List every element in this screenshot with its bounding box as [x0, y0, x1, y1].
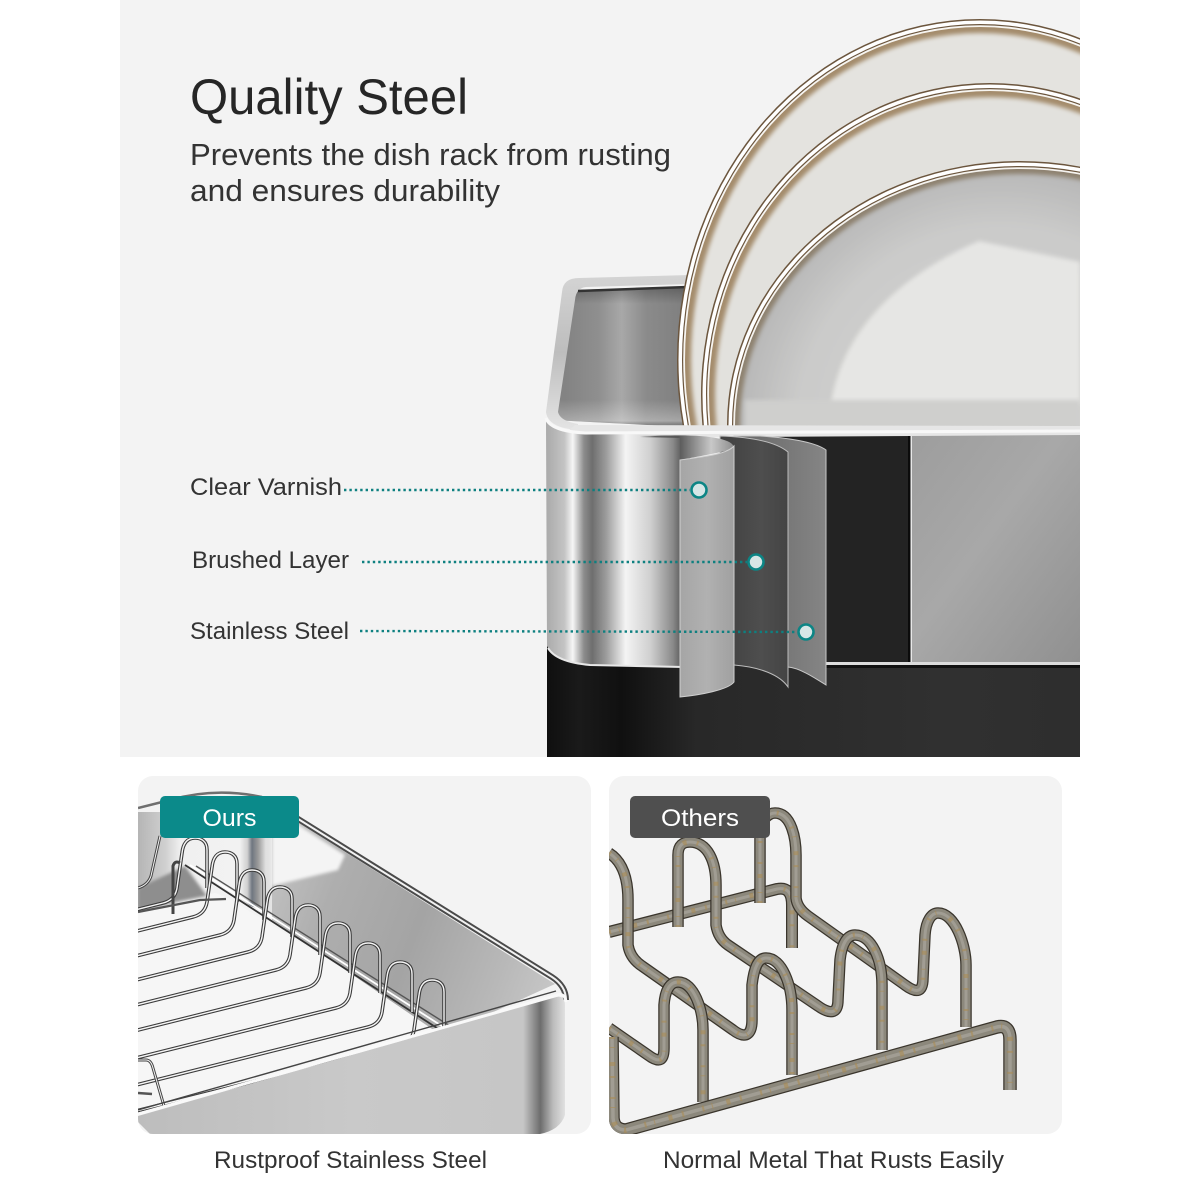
- steel cylinder corner: [546, 420, 690, 667]
- plate: front: [727, 161, 1080, 426]
- infographic: [120, 0, 1080, 1173]
- label: brushed layer: Brushed Layer: [192, 547, 349, 574]
- black window: [773, 436, 908, 662]
- plate: middle: [701, 83, 1080, 426]
- floor edge: [185, 865, 440, 1030]
- floor: [138, 890, 445, 1122]
- tube: front bar: [612, 1027, 1010, 1130]
- back rim arc: [138, 793, 262, 808]
- steel front panel: [912, 434, 1080, 662]
- card background: [609, 776, 1062, 1134]
- badge: others: Others: [661, 805, 739, 832]
- badge: others: [630, 796, 770, 838]
- subtitle: Prevents the dish rack from rusting: [190, 137, 671, 172]
- steel left edge: [910, 434, 912, 662]
- steel lower trim: [820, 662, 1080, 665]
- tube: second serpentine: [678, 842, 882, 1050]
- stainless tray photo: [138, 791, 569, 1134]
- right wall: [272, 806, 555, 1033]
- title: Quality Steel: [190, 69, 468, 125]
- badge: ours: [160, 796, 299, 838]
- dish rack tray inner wall: [546, 275, 686, 429]
- label: brushed layer: [194, 550, 765, 573]
- front face: [138, 997, 565, 1134]
- label: clear varnish: Clear Varnish: [190, 474, 342, 501]
- subtitle: and ensures durability: [190, 173, 501, 208]
- cut-away layers: [640, 435, 826, 697]
- subtitle: [190, 137, 671, 208]
- caption: ours: Rustproof Stainless Steel: [214, 1147, 487, 1174]
- tube: front serpentine: [609, 982, 703, 1102]
- plate: back: [677, 19, 1080, 426]
- layer: brushed sheet: [720, 436, 788, 687]
- tube: third serpentine: [609, 853, 792, 1075]
- tube: back bar: [609, 889, 792, 948]
- rusty wire rack photo: [609, 813, 1010, 1130]
- label: clear varnish: [191, 478, 708, 499]
- caption: others: Normal Metal That Rusts Easily: [663, 1147, 1004, 1174]
- tube: rear serpentine: [760, 813, 966, 1027]
- trim shadow: [820, 665, 1080, 668]
- layer: clear varnish sheet: [680, 446, 734, 697]
- panel: quality steel hero: [120, 0, 1080, 757]
- wires: [138, 836, 446, 1112]
- card background: [138, 776, 591, 1134]
- label: stainless steel: Stainless Steel: [190, 618, 349, 645]
- cylinder inner ring: [640, 435, 734, 460]
- black base: [547, 640, 1080, 757]
- rim: [560, 425, 1080, 438]
- panel: ours: [138, 776, 591, 1173]
- back wall shadow: [138, 866, 207, 909]
- label: stainless steel: [191, 622, 815, 641]
- hero background: [120, 0, 1080, 757]
- layer: stainless steel sheet: [734, 436, 826, 685]
- window edge: [908, 436, 910, 662]
- wall reflection: [272, 824, 346, 887]
- back wall: [138, 812, 272, 913]
- rim: [295, 817, 566, 1000]
- plates: [677, 19, 1080, 426]
- badge: ours: Ours: [202, 805, 256, 832]
- panel: others: [609, 776, 1062, 1174]
